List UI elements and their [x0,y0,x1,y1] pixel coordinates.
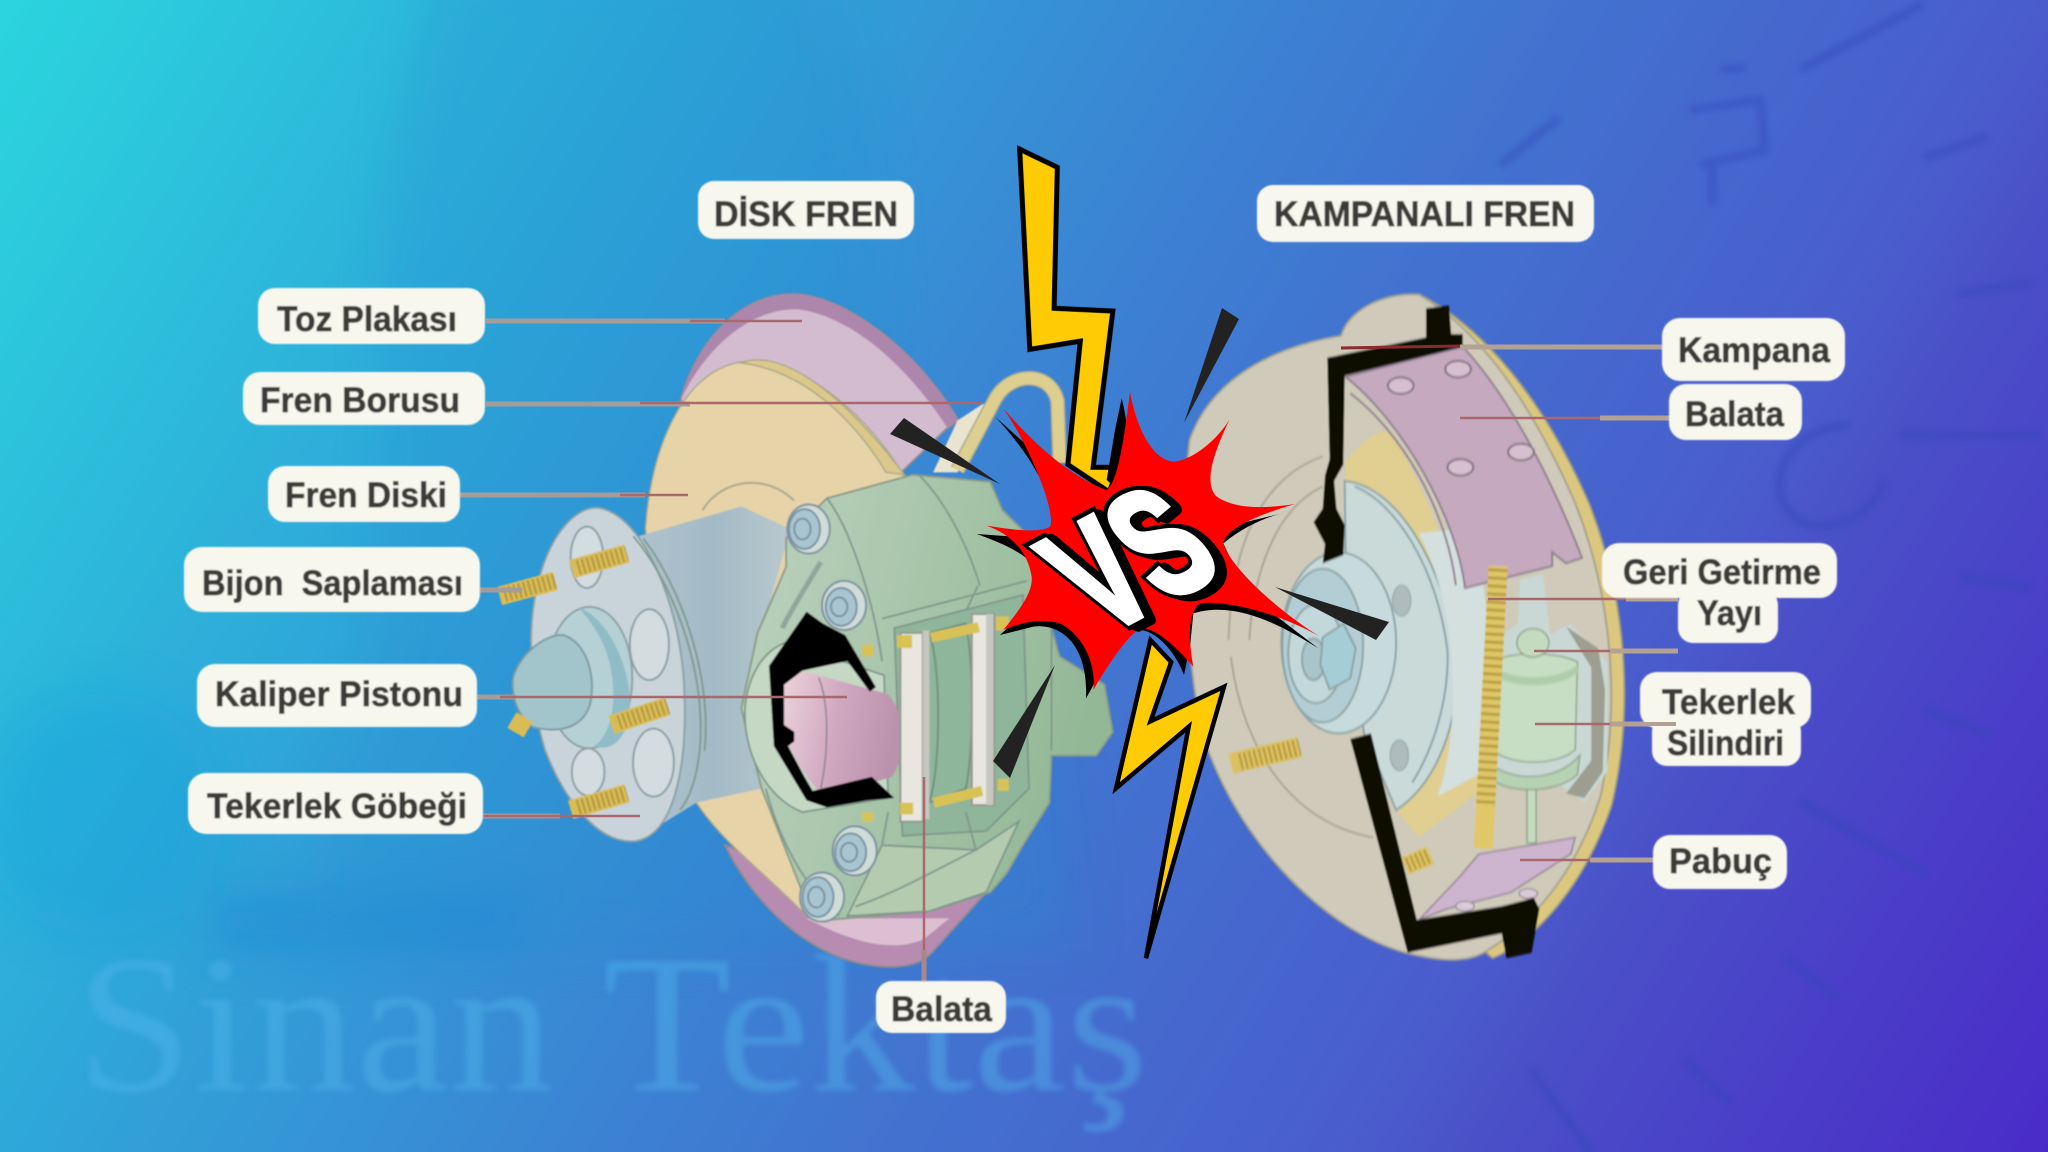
label: kampana: Kampana [1678,331,1831,370]
caliper body [741,475,1113,921]
burst shadow [977,398,1318,698]
label: balata (disk): Balata [891,990,993,1029]
label: balata (disk) [876,981,1006,1033]
label: kaliper pistonu [197,664,477,727]
brake pipe [933,378,1060,472]
line over tekerlek silindiri label [1640,722,1676,726]
vs starburst [977,392,1320,698]
vs text: VS [1010,455,1250,664]
wheel studs [500,554,668,810]
label: fren borusu [243,372,485,425]
label: bijon saplamasi [184,547,480,612]
red burst [987,392,1320,690]
lightning bolt upper [1020,149,1118,492]
light back-plate disc [1345,481,1488,810]
label: pabuc: Pabuç [1669,842,1772,881]
bracket ring [1566,626,1605,798]
heading: kampanali fren [1257,185,1594,242]
label: kaliper pistonu: Kaliper Pistonu [215,675,463,714]
wheel cylinder [1486,629,1580,843]
heading: disk fren [698,181,914,239]
label: balata (drum) [1669,384,1802,440]
drum face arcs [1229,456,1373,838]
black spike accents [890,308,1389,778]
caliper piston [784,672,903,791]
label: kampana [1662,318,1845,381]
label: fren borusu: Fren Borusu [260,381,460,420]
label: geri getirme yayi [1602,543,1837,643]
lightning bolt lower [1116,640,1224,958]
faded speedometer ticks and icons [1500,4,2040,1152]
black cutaway outline [769,612,894,807]
label: tekerlek silindiri: Silindiri [1667,724,1784,763]
black cutaway line upper [1314,306,1463,563]
caliper bolts [787,504,877,922]
label: bijon saplamasi: Bijon Saplaması [202,564,463,603]
label: fren diski: Fren Diski [285,476,447,515]
central hub and nut [1281,552,1396,733]
label: tekerlek gobegi: Tekerlek Göbeği [207,787,467,826]
vs text: VS [1018,456,1257,665]
drum outer rim [1419,295,1624,958]
label: toz plakasi [258,288,485,344]
drum wheel studs [1231,747,1431,866]
label: geri getirme yayi: Yayı [1697,594,1762,633]
brake pads [900,614,994,822]
heading: kampanali fren: KAMPANALI FREN [1274,195,1575,234]
dust plate [680,294,986,967]
label: toz plakasi: Toz Plakası [277,300,457,339]
disc brake illustration [500,294,1113,967]
vs text: VS [1010,455,1250,664]
return spring [1483,566,1498,849]
faded background: portrait silhouette [0,0,1080,953]
brake disc [645,360,904,916]
label: pabuc [1653,835,1787,889]
black cutaway line lower [1350,733,1539,958]
leader lines [457,321,1678,981]
pad guide pins [868,616,1003,822]
label: tekerlek silindiri: Tekerlek [1662,683,1796,722]
label: balata (drum): Balata [1685,395,1784,434]
brake shoe (pabuc) [1419,838,1575,920]
faded watermark text: Sinan Tektaş [76,916,1148,1133]
drum back plate [1185,294,1611,960]
label: fren diski [268,466,460,522]
grey cylinder bracket [1488,574,1607,802]
label: geri getirme yayi: Geri Getirme [1623,553,1821,592]
inner drum tan area [1345,431,1483,838]
wheel hub [513,506,790,841]
label: tekerlek gobegi [188,773,483,834]
label: tekerlek silindiri [1640,672,1811,766]
heading: disk fren: DİSK FREN [714,195,898,234]
drum brake illustration [1185,294,1624,960]
brake shoe lining [1346,347,1582,588]
